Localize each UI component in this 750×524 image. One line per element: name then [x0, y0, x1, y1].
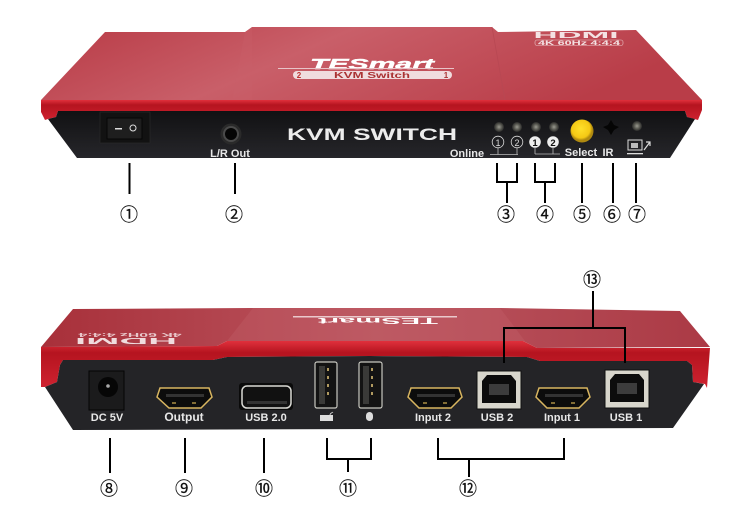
- selected indicator LEDs: 1: [532, 138, 538, 149]
- callout 1: ①: [120, 201, 138, 227]
- callout 13: [504, 266, 625, 363]
- USB-B port 2: [477, 371, 521, 409]
- device: front panel view: [41, 27, 702, 160]
- label: USB 1: USB 1: [610, 412, 642, 424]
- logo: HDMI upside-down: HDMI: [75, 336, 177, 345]
- callout 11: ⑪: [339, 475, 357, 501]
- label: IR: IR: [602, 147, 614, 159]
- label: DC 5V: DC 5V: [91, 412, 124, 424]
- black rear face: [45, 356, 704, 430]
- callout 1: [120, 163, 138, 227]
- callout 3: ③: [497, 201, 515, 227]
- online indicator LEDs: 1: [495, 138, 501, 148]
- black front face: [48, 111, 695, 158]
- device: rear panel view: [41, 308, 710, 430]
- callout 5: ⑤: [573, 201, 591, 227]
- logo: HDMI upside-down: 4K 60Hz 4:4:4: [78, 331, 182, 337]
- label: Input 1: Input 1: [544, 412, 580, 424]
- callout 9: [175, 438, 193, 501]
- top cover of rear device: [41, 308, 710, 348]
- USB mouse port: [359, 362, 382, 408]
- callout 13: ⑬: [583, 266, 601, 292]
- yellow select button: [570, 120, 594, 142]
- callout 2: ②: [225, 201, 243, 227]
- logo: TESmart KVM Switch: TESmart: [310, 57, 436, 73]
- logo: HDMI 4K 60Hz 4:4:4: HDMI: [534, 31, 618, 40]
- callout 8: ⑧: [100, 475, 118, 501]
- callout 10: ⑩: [255, 475, 273, 501]
- label: Online: Online: [450, 148, 484, 160]
- callout 8: [100, 438, 118, 501]
- callout 5: [573, 163, 591, 227]
- HDMI input 2 port: [408, 388, 462, 408]
- callout 6: [603, 163, 621, 227]
- callout 12: ⑫: [459, 475, 477, 501]
- online indicator LEDs: [490, 122, 523, 154]
- callout 6: ⑥: [603, 201, 621, 227]
- USB keyboard port: [315, 362, 337, 408]
- USB 2.0 port: [239, 383, 293, 410]
- label: USB 2.0: USB 2.0: [245, 412, 287, 424]
- red rear lip: [41, 341, 710, 388]
- audio jack: [220, 124, 242, 144]
- top cover of front device: [41, 27, 702, 100]
- label: Input 2: Input 2: [415, 412, 451, 424]
- callout 7: [628, 163, 646, 227]
- logo: TESmart KVM Switch: KVM Switch: [334, 71, 410, 80]
- rocker power switch: [100, 112, 150, 143]
- HDMI output port: [157, 388, 212, 408]
- logo: TESmart KVM Switch: [278, 57, 454, 80]
- logo: HDMI 4K 60Hz 4:4:4: [534, 31, 623, 47]
- logo: HDMI 4K 60Hz 4:4:4: 4K 60Hz 4:4:4: [538, 41, 621, 47]
- label: USB 2: USB 2: [481, 412, 513, 424]
- icon: mouse: [366, 412, 373, 421]
- logo: TESmart upside-down: TESmart: [317, 316, 438, 325]
- selected indicator LEDs: 2: [550, 138, 556, 149]
- power LED: [632, 121, 642, 131]
- red front lip: [41, 100, 702, 120]
- callout 4: [535, 163, 555, 227]
- IR window icon: [603, 120, 619, 135]
- selected indicator LEDs: [529, 122, 560, 154]
- callout 3: [497, 163, 517, 227]
- callout 11: [327, 438, 371, 501]
- callout 9: ⑨: [175, 475, 193, 501]
- online indicator LEDs: 2: [514, 138, 520, 148]
- icon: keyboard: [320, 412, 333, 421]
- callout 4: ④: [536, 201, 554, 227]
- label: L/R Out: L/R Out: [210, 148, 250, 160]
- logo: HDMI upside-down: [75, 331, 182, 345]
- callout 12: [438, 438, 564, 501]
- label: Select: Select: [565, 147, 598, 159]
- icon: monitor remote: [627, 140, 650, 154]
- DC power jack: [89, 371, 124, 410]
- USB-B port 1: [605, 370, 649, 408]
- logo: TESmart KVM Switch: 2: [297, 71, 302, 80]
- callout 2: [225, 163, 243, 227]
- callout 7: ⑦: [628, 201, 646, 227]
- heading: KVM SWITCH: KVM SWITCH: [287, 125, 457, 144]
- logo: TESmart KVM Switch: 1: [444, 71, 449, 80]
- label: Output: Output: [164, 410, 204, 424]
- callout 10: [255, 438, 273, 501]
- HDMI input 1 port: [536, 388, 590, 408]
